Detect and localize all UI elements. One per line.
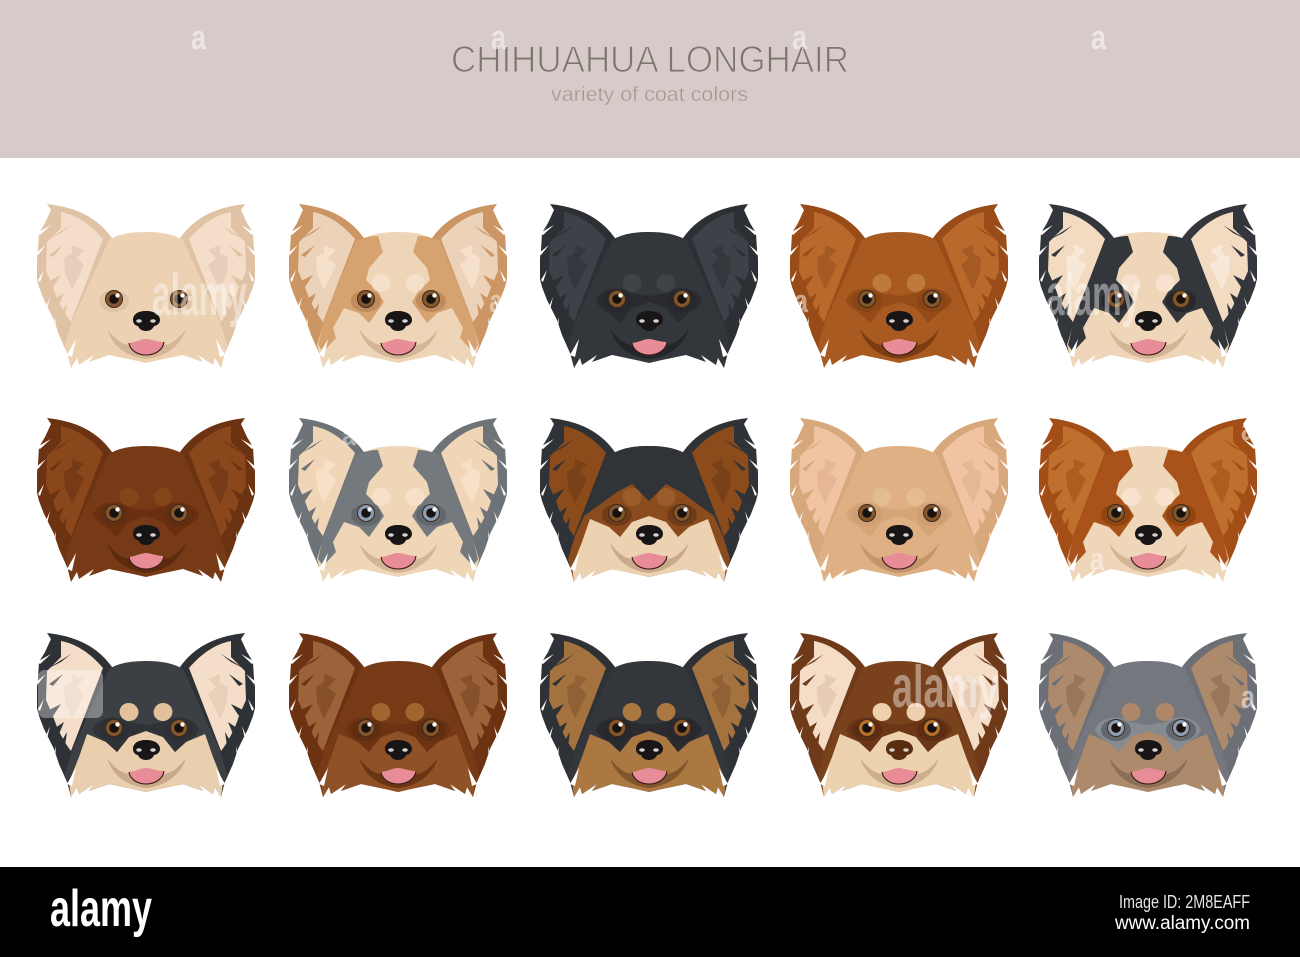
header band (0, 0, 1300, 158)
watermark letter on tenth dog lower: a (1090, 541, 1104, 577)
dog: tricolor (539, 418, 759, 582)
dog: black (539, 204, 759, 368)
watermark letter on fifteenth dog: a (1241, 679, 1255, 715)
dog: black and tan (36, 633, 256, 797)
dog: cream (36, 204, 256, 368)
dog: red (789, 204, 1009, 368)
dog: blue and tan (1038, 633, 1258, 797)
footer logo: alamy (50, 880, 152, 938)
watermark letter on second dog: a (489, 283, 503, 319)
watermark letter on seventh dog: a (342, 420, 356, 451)
footer url: www.alamy.com (1114, 913, 1250, 934)
watermark box on eleventh dog (38, 670, 103, 718)
dog: chocolate and tan (288, 633, 508, 797)
dog: chocolate (36, 418, 256, 582)
title: CHIHUAHUA LONGHAIR (451, 39, 849, 80)
dog: merle parti (288, 418, 508, 582)
watermark letter title right: a (792, 19, 808, 57)
dog: cream with tan patches (288, 204, 508, 368)
watermark letter far left: a (191, 19, 207, 57)
watermark on first dog: alamy (152, 263, 247, 328)
watermark letter title left: a (491, 19, 507, 57)
watermark letter far right: a (1091, 19, 1107, 57)
dog: chocolate and cream (789, 633, 1009, 797)
footer image id: Image ID: 2M8EAFF (1119, 892, 1250, 912)
dog: fawn (789, 418, 1009, 582)
watermark letter on fourth dog: a (794, 283, 808, 319)
dog: black with tan ears (539, 633, 759, 797)
footer bar (0, 867, 1300, 957)
dog: red and white parti (1038, 418, 1258, 582)
subtitle: variety of coat colors (551, 84, 748, 106)
dog: black and white parti (1038, 204, 1258, 368)
watermark on fourteenth dog: alamy (892, 654, 999, 720)
watermark on fifth dog: alamy (1046, 263, 1140, 328)
watermark letter on tenth dog upper: a (1241, 411, 1255, 447)
